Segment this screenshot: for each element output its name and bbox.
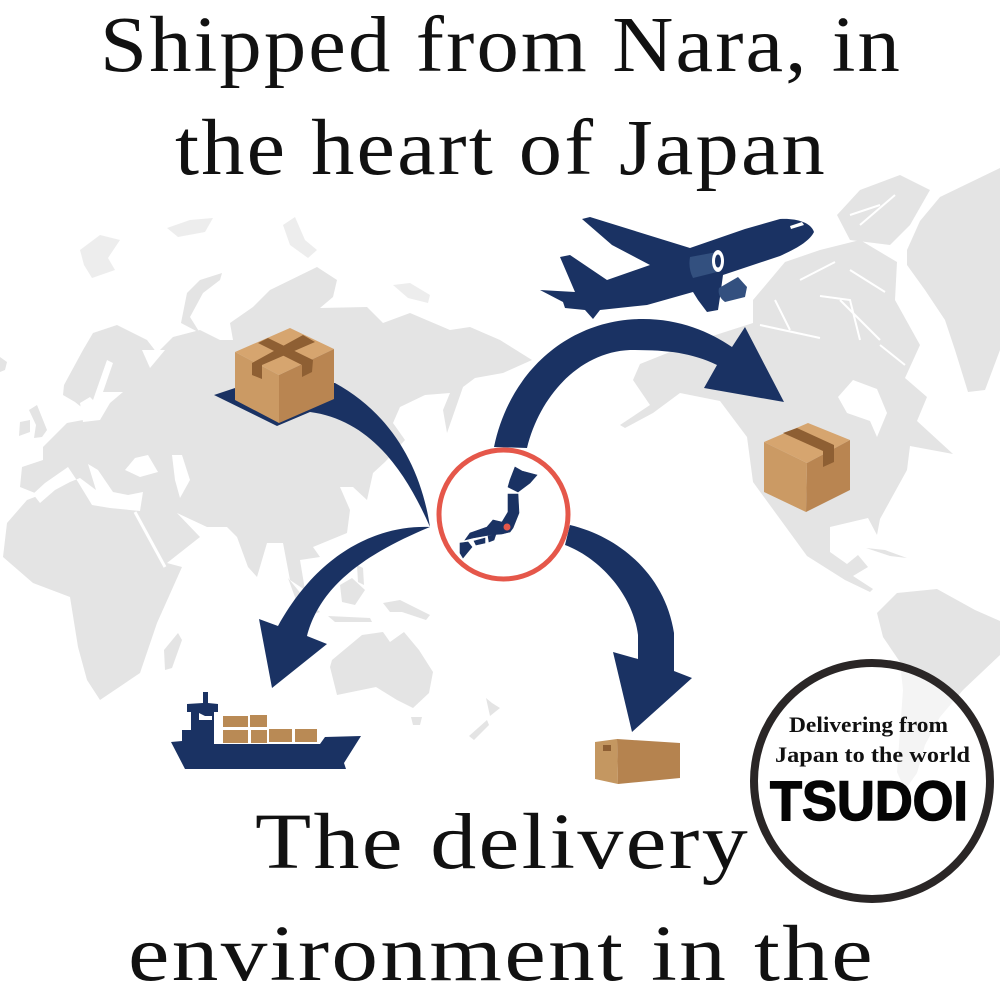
arrow: to container ship	[259, 527, 430, 688]
badge: TSUDOI logo	[754, 663, 990, 899]
title: Shipped from Nara, in	[100, 2, 902, 89]
icon: parcel top-left	[235, 328, 334, 423]
arrow: to bottom parcel	[565, 525, 692, 732]
title	[100, 2, 902, 192]
icon: parcel right	[764, 423, 850, 512]
icon: airplane	[540, 217, 814, 319]
world map background	[0, 168, 1000, 790]
badge: TSUDOI logo: Delivering from	[789, 712, 948, 737]
subheading: The delivery	[255, 799, 750, 886]
badge: TSUDOI logo: Japan to the world	[775, 742, 970, 767]
arrow: to North America	[494, 319, 784, 448]
arrow: to top-left parcel	[214, 383, 430, 527]
title: the heart of Japan	[175, 105, 827, 192]
subheading: environment in the	[128, 911, 875, 998]
icon: container ship	[171, 692, 361, 769]
icon: flat parcel bottom	[595, 739, 680, 784]
subheading	[128, 799, 875, 998]
Japan circle marker	[439, 450, 568, 579]
badge: TSUDOI logo: TSUDOI	[770, 769, 968, 832]
